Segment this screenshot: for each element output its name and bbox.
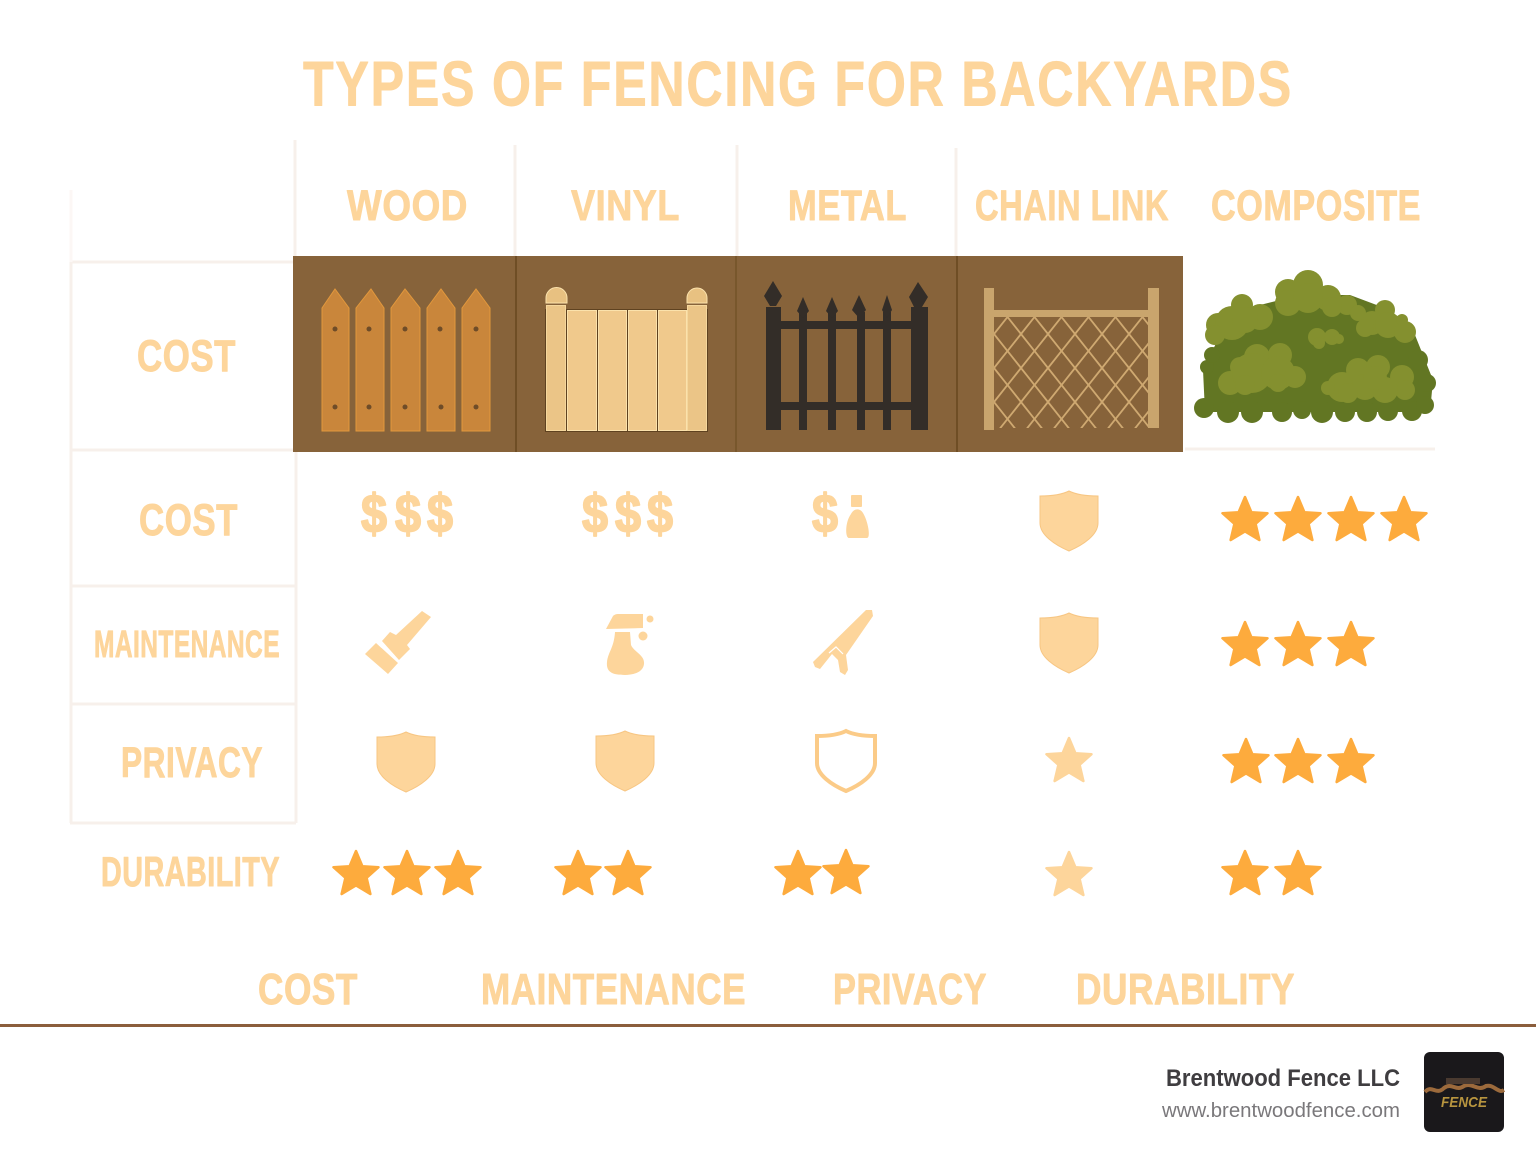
- rating stars: [334, 497, 1426, 894]
- icon: chain link fence: [984, 288, 1159, 430]
- row: cost icons: $: [615, 484, 641, 544]
- shield icons: [377, 491, 1098, 792]
- lower-left foliage: [1244, 344, 1270, 370]
- footer logo: FENCE: [1441, 1094, 1488, 1111]
- row: cost icons: $: [395, 484, 421, 544]
- row headings: COST: [137, 330, 236, 381]
- centre foliage: [1308, 328, 1326, 346]
- title: TYPES OF FENCING FOR BACKYARDS: [303, 49, 1293, 119]
- icon: hand saw: [813, 610, 873, 675]
- column headings: WOOD: [347, 183, 468, 230]
- row: cost icons: $: [582, 484, 608, 544]
- icon: composite hedge: [1194, 270, 1436, 423]
- row: cost icons: $: [427, 484, 453, 544]
- icon: money bag: [846, 495, 869, 538]
- row headings: MAINTENANCE: [94, 623, 280, 666]
- row: cost icons: $: [361, 484, 387, 544]
- bottom legend: [258, 965, 1295, 1014]
- panel: fence illustrations: [293, 256, 1183, 452]
- column headings: COMPOSITE: [1211, 183, 1421, 230]
- footer logo: [1424, 1052, 1504, 1132]
- pale stars: [1046, 738, 1092, 895]
- bottom legend: MAINTENANCE: [481, 965, 746, 1014]
- row headings: PRIVACY: [121, 740, 263, 787]
- row headings: COST: [139, 494, 238, 545]
- icon: metal fence: [764, 281, 928, 430]
- top-centre foliage: [1293, 270, 1323, 300]
- icon: spray bottle: [606, 614, 654, 675]
- column headings: [347, 183, 1421, 230]
- row headings: DURABILITY: [101, 850, 280, 896]
- lower-right foliage: [1327, 372, 1357, 402]
- row: cost icons: [361, 484, 869, 544]
- right foliage: [1375, 300, 1395, 320]
- row: cost icons: $: [812, 484, 838, 544]
- footer website: www.brentwoodfence.com: [1161, 1100, 1400, 1122]
- row: maintenance icons: [365, 610, 873, 675]
- row: cost icons: $: [647, 484, 673, 544]
- icon: wood fence: [322, 289, 490, 431]
- column headings: CHAIN LINK: [975, 183, 1169, 230]
- row headings: [94, 330, 280, 896]
- bottom legend: PRIVACY: [833, 965, 987, 1014]
- column headings: METAL: [788, 183, 907, 230]
- top-left foliage: [1206, 313, 1230, 337]
- icon: paint brush: [365, 611, 431, 674]
- icon: vinyl fence: [545, 288, 708, 432]
- footer company name: Brentwood Fence LLC: [1166, 1065, 1400, 1092]
- bottom legend: COST: [258, 965, 358, 1014]
- bottom legend: DURABILITY: [1076, 965, 1295, 1014]
- column headings: VINYL: [571, 183, 680, 230]
- icon: outline shield: [817, 731, 875, 791]
